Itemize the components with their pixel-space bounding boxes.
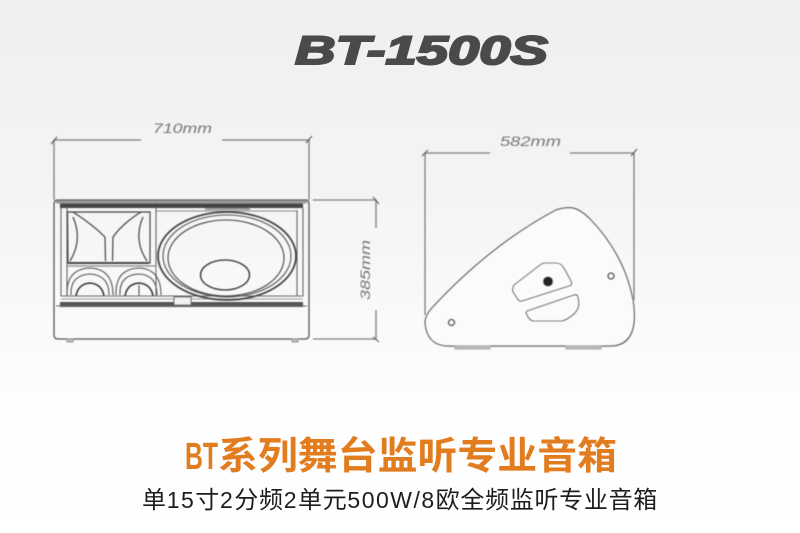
title: BT-1500S — [295, 29, 548, 73]
handle knob — [544, 277, 552, 286]
cabinet outline — [54, 200, 309, 339]
lower handle recess — [526, 295, 579, 321]
right bass port — [116, 268, 161, 296]
foot pads — [67, 339, 298, 342]
front view of speaker — [54, 200, 309, 342]
side view of speaker — [425, 208, 634, 349]
dimension: width 710mm — [51, 120, 312, 200]
right screw — [608, 273, 614, 279]
side profile — [425, 208, 634, 346]
centre clip — [174, 297, 191, 305]
orange heading: 系列舞台监听专业音箱 — [218, 436, 617, 478]
woofer cone — [158, 209, 296, 300]
top and bottom grille bars — [56, 200, 307, 307]
dimension: depth 582mm: 582mm — [500, 133, 561, 149]
left screw — [448, 320, 454, 326]
orange heading: BT — [185, 436, 218, 478]
left bass port — [67, 268, 113, 296]
dimension: height 385mm: 385mm — [357, 240, 373, 300]
feet — [455, 346, 601, 349]
horn drivers — [67, 212, 156, 272]
top handle recess — [513, 263, 572, 301]
dimension: width 710mm: 710mm — [153, 120, 212, 136]
subtitle: 单15寸2分频2单元500W/8欧全频监听专业音箱 — [142, 487, 658, 514]
dimension: height 385mm — [313, 197, 379, 342]
dimension: depth 582mm — [422, 133, 637, 315]
